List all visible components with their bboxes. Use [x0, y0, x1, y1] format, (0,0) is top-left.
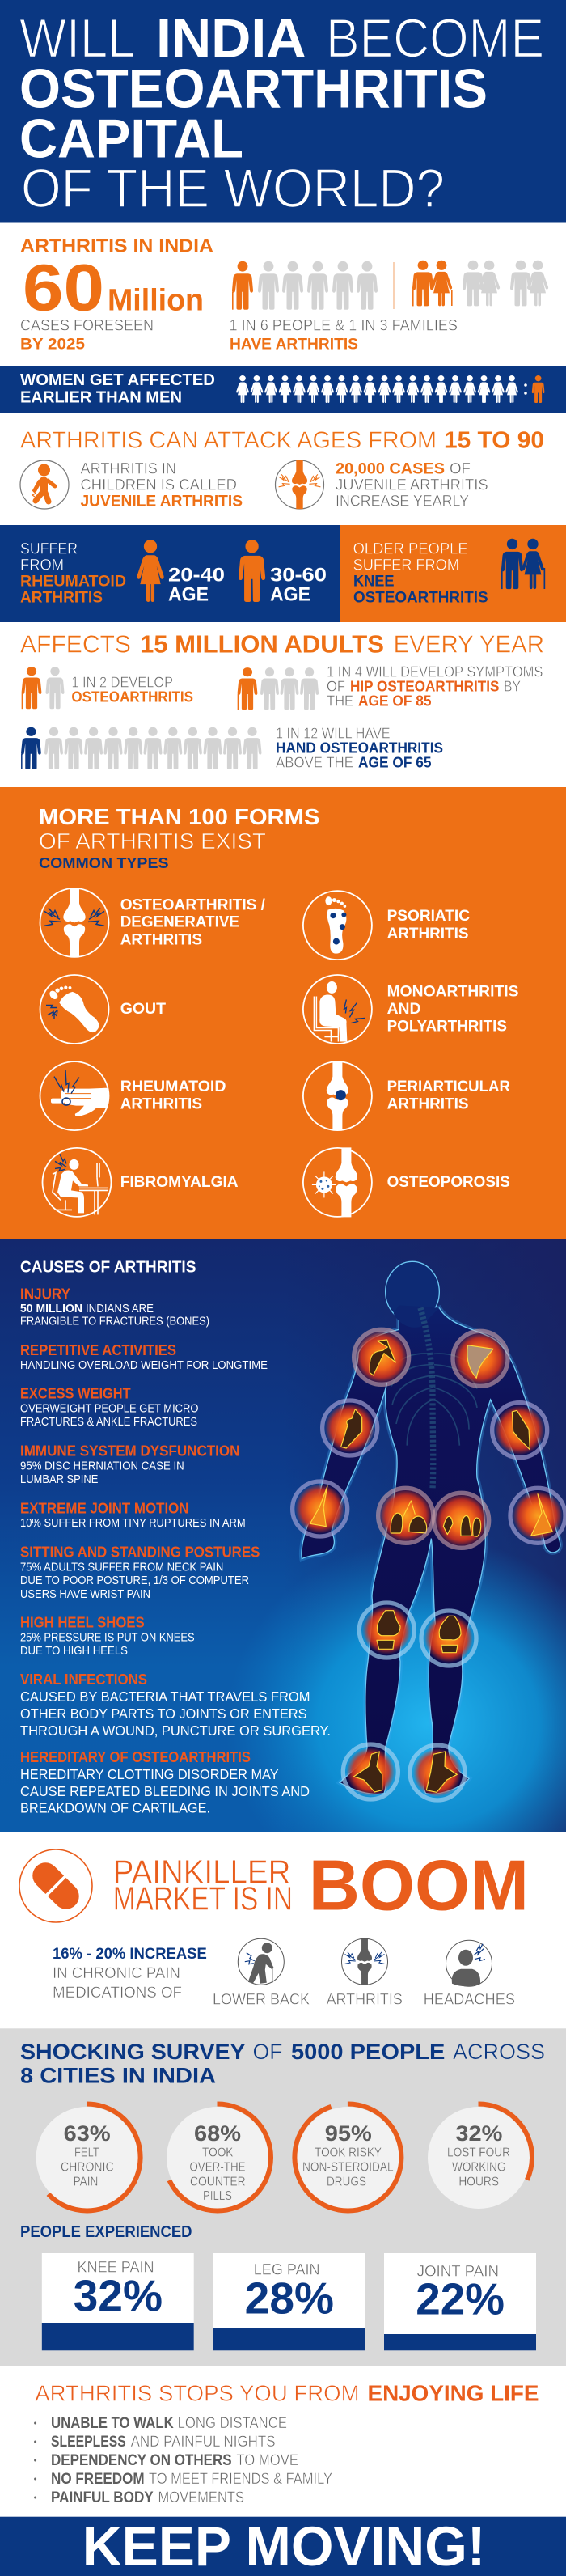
- heading: EARLIER THAN MEN: [20, 388, 182, 406]
- text: cases foreseen: BY 2025: [20, 337, 85, 354]
- cause: repetitive activities: [21, 1345, 267, 1369]
- joint bones: [310, 1340, 552, 1792]
- text: older people: KNEE: [353, 573, 395, 591]
- cause: high heel shoes: DUE TO HIGH HEELS: [20, 1645, 128, 1658]
- donut: 32 percent: WORKING: [452, 2161, 505, 2175]
- label: headaches: HEADACHES: [424, 1990, 515, 2008]
- subheading: PEOPLE EXPERIENCED: [20, 2223, 192, 2241]
- donut: 95 percent: DRUGS: [327, 2176, 366, 2189]
- heading: WOMEN GET AFFECTED: [20, 371, 215, 389]
- cause: hereditary: CAUSE REPEATED BLEEDING IN JOINTS AND: [20, 1783, 310, 1799]
- text: suffer from rheumatoid arthritis: ARTHRITIS: [20, 589, 103, 607]
- donut: 63 percent: 63%: [64, 2121, 111, 2146]
- donut: 68 percent: [164, 2104, 271, 2210]
- bullet list: MOVEMENTS: [158, 2489, 244, 2506]
- text: 1 in 4: [327, 664, 543, 710]
- card: leg pain: 28%: [245, 2273, 334, 2323]
- icon row: 1 in 6 people: [232, 261, 378, 310]
- cause: sitting and standing postures: 75% ADULTS SUFFER FROM NECK PAIN: [20, 1561, 223, 1574]
- donut: 68 percent: 68%: [194, 2121, 241, 2146]
- text: 1 in 2: [71, 675, 193, 705]
- heading: [39, 804, 320, 871]
- cause: viral infections: [20, 1671, 331, 1739]
- icon: child with joint pain: [20, 460, 69, 509]
- text: 1 in 4: HIP OSTEOARTHRITIS: [350, 679, 499, 695]
- icon row: 1 in 4: [238, 667, 319, 710]
- icon: headache: [446, 1940, 492, 1986]
- donut: 32 percent: [425, 2104, 532, 2210]
- text: 1 in 6: [230, 318, 458, 354]
- heading: MORE THAN 100 FORMS: [39, 804, 320, 829]
- bullet list: DEPENDENCY ON OTHERS: [51, 2451, 232, 2469]
- text: suffer from rheumatoid arthritis: [20, 540, 126, 607]
- label: lower back: LOWER BACK: [213, 1990, 310, 2008]
- bullet list: NO FREEDOM: [51, 2470, 145, 2488]
- text: 1 in 4: AGE OF 85: [358, 693, 432, 710]
- card: joint pain: [384, 2253, 536, 2350]
- label: monoarthritis: POLYARTHRITIS: [387, 1018, 507, 1036]
- label: arthritis: ARTHRITIS: [327, 1990, 403, 2008]
- text: 1 in 4: BY: [504, 679, 521, 695]
- text: 1 in 4: OF: [327, 679, 345, 695]
- cause: viral infections: VIRAL INFECTIONS: [20, 1671, 147, 1688]
- heading: SHOCKING SURVEY: [20, 2040, 246, 2064]
- donut: 95 percent: 95%: [325, 2121, 372, 2146]
- text: 16-20 percent increase: 16% - 20% INCREASE: [53, 1945, 207, 1963]
- text: suffer from rheumatoid arthritis: FROM: [20, 557, 64, 574]
- label: psoriatic: PSORIATIC: [387, 907, 470, 925]
- panel: shocking survey: [0, 2028, 566, 2366]
- text: 1 in 2: OSTEOARTHRITIS: [71, 689, 193, 705]
- cause: injury: INJURY: [20, 1285, 71, 1303]
- bullet list: PAINFUL BODY: [51, 2489, 154, 2506]
- icon: rheumatoid hand: [40, 1061, 108, 1130]
- icon: desk worker: [42, 1148, 112, 1217]
- call to action: KEEP MOVING!: [82, 2515, 485, 2576]
- cause: extreme joint motion: [21, 1503, 245, 1527]
- heading: OF ARTHRITIS EXIST: [39, 828, 266, 854]
- heading: PAINKILLER: [113, 1853, 290, 1890]
- text: 1 in 4: 1 IN 4 WILL DEVELOP SYMPTOMS: [327, 664, 543, 680]
- label: psoriatic: [387, 907, 470, 943]
- heading: 15 TO 90: [444, 427, 544, 453]
- text: 1 in 12: AGE OF 65: [358, 755, 432, 771]
- icon: osteoarthritis joint: [40, 888, 108, 957]
- bullet list: TO MEET FRIENDS & FAMILY: [149, 2470, 332, 2488]
- icon: arthritis knee: [341, 1938, 388, 1985]
- cause: immune system dysfunction: IMMUNE SYSTEM DYSFUNCTION: [20, 1442, 239, 1460]
- label: osteoarthritis: OSTEOARTHRITIS /: [120, 896, 266, 913]
- panel: more than 100 forms: [0, 787, 566, 1239]
- label: monoarthritis: [387, 982, 519, 1036]
- cause: hereditary: [21, 1752, 309, 1812]
- heading: 8 CITIES IN INDIA: [20, 2063, 216, 2087]
- text: juvenile arthritis: [81, 460, 243, 511]
- panel: older people knee osteoarthritis: [340, 525, 566, 622]
- illustration: human body with inflamed joints: [293, 1261, 565, 1800]
- label: 20-40 age: AGE: [168, 584, 209, 606]
- donut: 63 percent: FELT: [74, 2146, 99, 2160]
- cause: extreme joint motion: EXTREME JOINT MOTION: [20, 1500, 189, 1517]
- cause: injury: FRANGIBLE TO FRACTURES (BONES): [20, 1316, 209, 1328]
- icon row: 1 in 12: [21, 727, 261, 769]
- icon row: 1 in 2: [22, 667, 64, 709]
- cause: viral infections: THROUGH A WOUND, PUNCTURE OR SURGERY.: [20, 1722, 331, 1739]
- icon: pill: [19, 1849, 92, 1922]
- donut: 32 percent: HOURS: [458, 2176, 499, 2189]
- label: periarticular: [387, 1078, 510, 1113]
- card: knee pain: KNEE PAIN: [78, 2258, 154, 2276]
- label: fibromyalgia: FIBROMYALGIA: [120, 1173, 239, 1191]
- text: cases foreseen: CASES FORESEEN: [20, 318, 154, 335]
- cause: viral infections: OTHER BODY PARTS TO JOINTS OR ENTERS: [20, 1705, 307, 1722]
- label: 30-60 age: [270, 565, 327, 606]
- label: rheumatoid: ARTHRITIS: [120, 1095, 202, 1113]
- icon: knee joint: [275, 460, 323, 509]
- bullet list: TO MOVE: [236, 2451, 298, 2469]
- panel: ages 15 to 90: [20, 427, 544, 511]
- donut: 32 percent: 32%: [455, 2121, 502, 2146]
- donut: 63 percent: [34, 2104, 141, 2210]
- panel: arthritis in India: [20, 235, 548, 354]
- text: 1 in 6: HAVE ARTHRITIS: [230, 337, 358, 354]
- donut: 95 percent: [294, 2104, 401, 2210]
- cause: viral infections: CAUSED BY BACTERIA THAT TRAVELS FROM: [20, 1688, 310, 1705]
- text: 1 in 4: THE: [327, 693, 353, 710]
- panel: 15 million adults: [20, 631, 544, 771]
- label: osteoarthritis: DEGENERATIVE: [120, 913, 239, 931]
- icon row: 20 women to 1 man: [236, 375, 544, 403]
- heading: ARTHRITIS IN INDIA: [20, 235, 213, 256]
- panel: title banner: [0, 0, 566, 223]
- label: osteoporosis: OSTEOPOROSIS: [387, 1173, 510, 1191]
- text: 16-20 percent increase: MEDICATIONS OF: [53, 1984, 182, 2002]
- joint rings: [293, 1329, 565, 1800]
- skeleton: spine and ribs: [391, 1308, 477, 1489]
- title: CAPITAL: [19, 108, 243, 169]
- text: suffer from rheumatoid arthritis: SUFFER: [20, 540, 78, 558]
- heading: BOOM: [309, 1845, 529, 1925]
- label: rheumatoid: [120, 1078, 226, 1113]
- heading: ACROSS: [453, 2040, 545, 2064]
- cause: excess weight: OVERWEIGHT PEOPLE GET MICRO: [20, 1403, 199, 1416]
- text: older people: SUFFER FROM: [353, 557, 459, 574]
- text: 1 in 12: ABOVE THE: [276, 755, 353, 771]
- bullet list: [34, 2414, 332, 2506]
- donut: 68 percent: PILLS: [203, 2189, 232, 2203]
- donut: 68 percent: COUNTER: [190, 2176, 246, 2189]
- cause: high heel shoes: 25% PRESSURE IS PUT ON KNEES: [20, 1631, 195, 1644]
- cause: extreme joint motion: 10% SUFFER FROM TINY RUPTURES IN ARM: [20, 1517, 246, 1530]
- cause: immune system dysfunction: [21, 1445, 239, 1483]
- text: 20,000 cases: INCREASE YEARLY: [336, 493, 469, 511]
- title: INDIA: [156, 8, 306, 70]
- card: joint pain: JOINT PAIN: [417, 2262, 499, 2280]
- text: older people: [353, 540, 488, 607]
- text: suffer from rheumatoid arthritis: RHEUMATOID: [20, 573, 126, 591]
- icon: gout foot: [40, 975, 108, 1044]
- icon: man: [239, 540, 265, 602]
- panel: painkiller market: [19, 1845, 529, 2008]
- title: OSTEOARTHRITIS: [19, 57, 488, 119]
- title: BECOME: [326, 8, 544, 70]
- label: monoarthritis: AND: [387, 1000, 420, 1018]
- label: osteoarthritis: ARTHRITIS: [120, 930, 202, 948]
- label: 20-40 age: [168, 565, 225, 606]
- text: 1 in 2: 1 IN 2 DEVELOP: [71, 675, 173, 691]
- cause: injury: [20, 1285, 209, 1328]
- label: 30-60 age: AGE: [270, 584, 310, 606]
- donut: 95 percent: NON-STEROIDAL: [302, 2161, 394, 2175]
- panel: women affected earlier: [0, 366, 566, 413]
- heading: 5000 PEOPLE: [291, 2040, 445, 2064]
- icon: elderly couple: [501, 539, 545, 589]
- title: OF THE WORLD?: [21, 158, 445, 219]
- label: periarticular: ARTHRITIS: [387, 1095, 469, 1113]
- text: juvenile arthritis: ARTHRITIS IN: [81, 460, 176, 478]
- text: 20,000 cases: OF: [450, 460, 471, 478]
- heading: OF: [252, 2040, 283, 2064]
- bullet list: SLEEPLESS: [51, 2433, 126, 2451]
- cause: sitting and standing postures: USERS HAVE WRIST PAIN: [20, 1588, 150, 1601]
- stat: 60 million: 60: [23, 251, 104, 324]
- donut: 68 percent: OVER-THE: [189, 2161, 246, 2175]
- heading: [113, 1845, 529, 1925]
- donut: 68 percent: TOOK: [202, 2146, 234, 2160]
- bullet list: AND PAINFUL NIGHTS: [131, 2433, 276, 2451]
- heading: [20, 2040, 545, 2087]
- text: juvenile arthritis: CHILDREN IS CALLED: [81, 477, 237, 494]
- text: cases foreseen: [20, 318, 154, 354]
- label: osteoarthritis: [120, 896, 266, 948]
- card: joint pain: 22%: [416, 2274, 505, 2324]
- panel: keep moving banner: [0, 2515, 566, 2576]
- cause: excess weight: FRACTURES & ANKLE FRACTURES: [20, 1416, 197, 1429]
- cause: repetitive activities: REPETITIVE ACTIVITIES: [20, 1341, 176, 1358]
- card: knee pain: [42, 2253, 194, 2350]
- cause: injury: INDIANS ARE: [86, 1303, 154, 1316]
- heading: COMMON TYPES: [39, 854, 168, 871]
- text: juvenile arthritis: JUVENILE ARTHRITIS: [81, 493, 243, 511]
- title: [19, 8, 544, 219]
- icon: osteoporosis joint with virus: [303, 1147, 372, 1217]
- text: 1 in 12: [276, 726, 443, 771]
- card: knee pain: 32%: [74, 2270, 163, 2320]
- label: gout: GOUT: [120, 1000, 166, 1018]
- cause: excess weight: [21, 1388, 198, 1426]
- donut: 63 percent: PAIN: [74, 2176, 98, 2189]
- heading: ENJOYING LIFE: [367, 2380, 539, 2405]
- cause: repetitive activities: HANDLING OVERLOAD WEIGHT FOR LONGTIME: [20, 1359, 268, 1372]
- cause: immune system dysfunction: 95% DISC HERNIATION CASE IN: [20, 1460, 184, 1472]
- icon: psoriatic foot: [303, 891, 372, 960]
- label: 20-40 age: 20-40: [168, 565, 225, 587]
- text: 1 in 12: 1 IN 12 WILL HAVE: [276, 726, 391, 742]
- text: older people: OSTEOARTHRITIS: [353, 589, 488, 607]
- cause: hereditary: BREAKDOWN OF CARTILAGE.: [20, 1800, 210, 1816]
- panel: causes of arthritis: [0, 1239, 566, 1832]
- cause: high heel shoes: HIGH HEEL SHOES: [20, 1613, 145, 1630]
- text: 20,000 cases: [336, 460, 488, 511]
- label: rheumatoid: RHEUMATOID: [120, 1078, 226, 1095]
- icon: lower back: [238, 1938, 284, 1985]
- heading: AFFECTS: [20, 631, 131, 659]
- text: 1 in 6: 1 IN 6 PEOPLE & 1 IN 3 FAMILIES: [230, 318, 458, 335]
- cause: injury: 50 MILLION: [20, 1303, 82, 1316]
- icon: woman: [137, 540, 164, 602]
- heading: CAUSES OF ARTHRITIS: [20, 1257, 196, 1277]
- label: 30-60 age: 30-60: [270, 565, 327, 587]
- heading: ARTHRITIS STOPS YOU FROM: [35, 2380, 360, 2405]
- donut: 63 percent: CHRONIC: [61, 2161, 114, 2175]
- text: 1 in 12: HAND OSTEOARTHRITIS: [276, 740, 443, 756]
- cause: immune system dysfunction: LUMBAR SPINE: [20, 1473, 99, 1486]
- bullet list: UNABLE TO WALK: [51, 2414, 174, 2432]
- heading: [20, 371, 215, 406]
- stat: 60 million: [23, 251, 204, 324]
- text: 20,000 cases: JUVENILE ARTHRITIS: [336, 477, 488, 494]
- heading: [35, 2380, 539, 2405]
- icon: periarticular joint: [303, 1061, 372, 1131]
- label: periarticular: PERIARTICULAR: [387, 1078, 510, 1095]
- donut: 95 percent: TOOK RISKY: [315, 2146, 382, 2160]
- donut: 32 percent: LOST FOUR: [447, 2146, 510, 2160]
- heading: EVERY YEAR: [394, 631, 544, 659]
- heading: 15 MILLION ADULTS: [140, 631, 384, 659]
- cause: hereditary: HEREDITARY CLOTTING DISORDER MAY: [20, 1766, 279, 1782]
- cause: excess weight: EXCESS WEIGHT: [20, 1385, 131, 1402]
- panel: rheumatoid and age groups: [0, 525, 340, 622]
- cause: sitting and standing postures: SITTING AND STANDING POSTURES: [20, 1544, 260, 1560]
- text: older people: OLDER PEOPLE: [353, 540, 468, 558]
- label: psoriatic: ARTHRITIS: [387, 925, 469, 943]
- icon row: 1 in 3 families: [412, 261, 548, 306]
- title: WILL: [19, 8, 135, 70]
- text: 16-20 percent increase: IN CHRONIC PAIN: [53, 1964, 180, 1982]
- cause: sitting and standing postures: DUE TO POOR POSTURE, 1/3 OF COMPUTER: [20, 1574, 249, 1587]
- heading: MARKET IS IN: [113, 1880, 293, 1917]
- cause: high heel shoes: [21, 1616, 194, 1654]
- label: monoarthritis: MONOARTHRITIS: [387, 982, 519, 1000]
- card: leg pain: [213, 2253, 365, 2350]
- text: 16-20 percent increase: [53, 1945, 207, 2002]
- heading: ARTHRITIS CAN ATTACK AGES FROM: [20, 427, 437, 453]
- bullet list: LONG DISTANCE: [178, 2414, 287, 2432]
- heading: [20, 631, 544, 659]
- cause: hereditary: HEREDITARY OF OSTEOARTHRITIS: [20, 1748, 251, 1765]
- panel: stops you enjoying life: [34, 2380, 539, 2506]
- icon: seated person: [303, 975, 372, 1044]
- cause: sitting and standing postures: [21, 1547, 260, 1598]
- text: 20,000 cases: 20,000 CASES: [336, 460, 445, 478]
- card: leg pain: LEG PAIN: [254, 2260, 320, 2278]
- stat: 60 million: Million: [108, 283, 204, 317]
- joint glows: [295, 1330, 563, 1797]
